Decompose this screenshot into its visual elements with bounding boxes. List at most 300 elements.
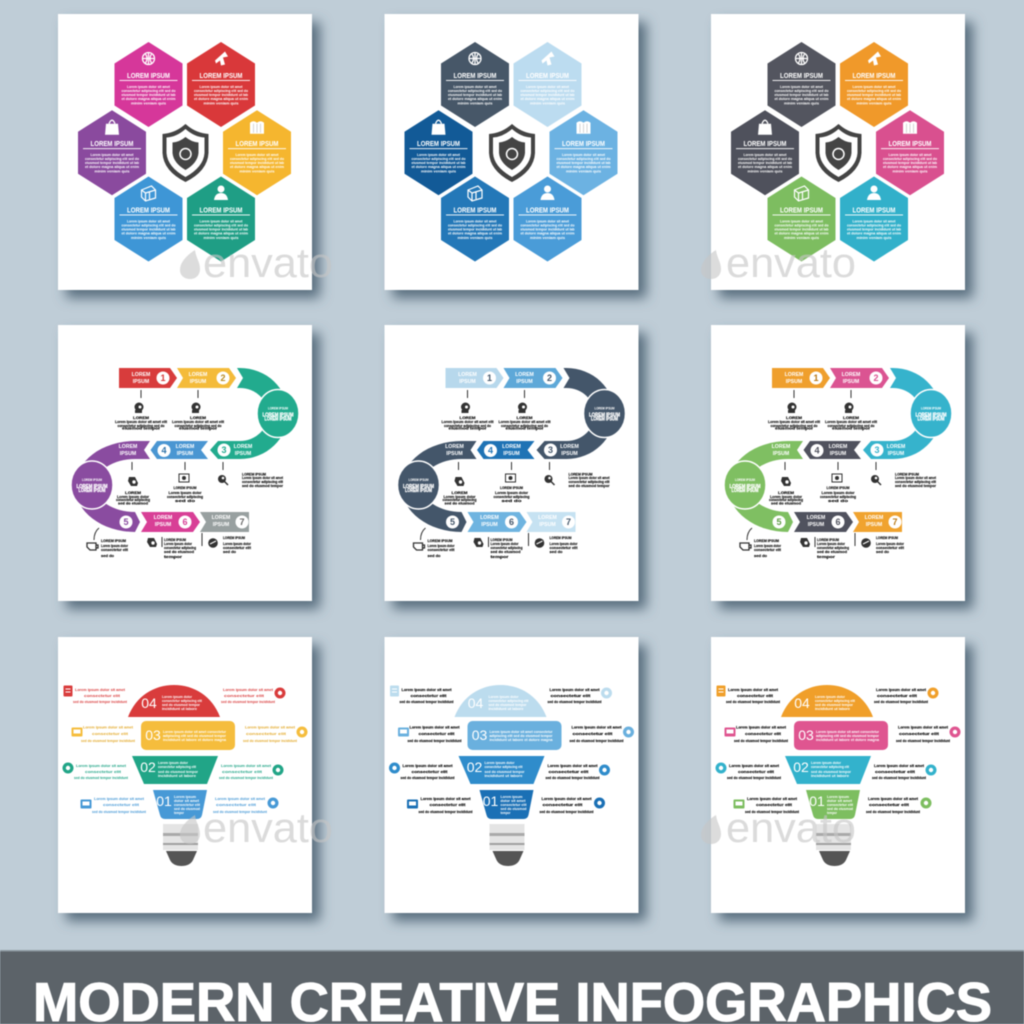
callout left band: Lorem ipsum dolor <box>117 495 149 499</box>
hexagon: blue: minim veniam quis <box>131 236 166 240</box>
side text second left: Lorem ipsum dolor sit amet <box>736 726 787 730</box>
hexagon: yellow: LOREM IPSUM <box>236 141 279 148</box>
hexagon: rose: et dolore magna aliqua ut enim <box>883 165 937 169</box>
step 7 arrow: LOREM <box>538 515 557 521</box>
bulb layer 04: Lorem ipsum dolor <box>815 695 846 699</box>
callout 5: Lorem ipsum dolor <box>754 544 781 548</box>
hexagon: strong blue: Lorem ipsum dolor sit amet <box>454 220 497 224</box>
side text blue right: Lorem ipsum dolor sit amet <box>215 797 266 801</box>
callout 6 <box>474 537 523 559</box>
circle label left: LOREM IPSUM <box>405 488 432 494</box>
callout 5 <box>740 528 782 558</box>
hexagon: slate: consectetur adipiscing elit sed do <box>448 89 503 93</box>
bulb layer 01: 01 <box>483 793 498 809</box>
hexagon: purple: LOREM IPSUM <box>90 141 134 148</box>
callout left band: LOREM <box>778 491 794 495</box>
side text top right: consectetur elit <box>877 694 918 698</box>
hexagon: mid blue: eiusmod tempor incididunt ut lab <box>520 228 575 232</box>
hexagon: pale blue: eiusmod tempor incididunt ut lab <box>520 93 575 97</box>
side text green right <box>219 764 284 780</box>
bulb layer 01: sed do eiusmod <box>174 807 200 811</box>
step 7 arrow: 7 <box>892 517 898 527</box>
hexagon: yellow <box>223 110 291 195</box>
step 4 arrow: LOREM <box>176 444 194 450</box>
circle label right: LOREM IPSUM <box>262 412 294 418</box>
step 1 arrow: IPSUM <box>459 379 476 385</box>
callout 1 <box>768 390 821 430</box>
hexagon: teal: LOREM IPSUM <box>852 208 896 214</box>
circle label right: LOREM IPSUM <box>589 412 620 418</box>
hexagon: pale blue: et dolore magna aliqua ut enim <box>520 97 574 101</box>
circle label left: LOREM IPSUM <box>403 484 434 490</box>
callout 5: sed do <box>428 554 441 558</box>
step 1 arrow: 1 <box>813 373 819 383</box>
step 4 arrow <box>150 441 208 459</box>
circle label left <box>71 461 113 509</box>
hexagon: sky blue <box>550 110 618 195</box>
hexagon: yellow: Lorem ipsum dolor sit amet <box>236 153 279 157</box>
callout 7: LOREM IPSUM <box>550 536 572 540</box>
hexagon: strong blue: minim veniam quis <box>458 236 492 240</box>
callout left band: LOREM <box>125 491 141 495</box>
circle label left: LOREM IPSUM <box>76 484 108 490</box>
icon: shield <box>816 124 862 182</box>
callout 6: tempor <box>817 555 836 559</box>
step 4 arrow: 4 <box>488 446 493 456</box>
bulb layer 03: adipiscing elit sed do eiusmod tempor <box>816 734 880 738</box>
bulb layer 03: Lorem ipsum dolor sit amet consectetur <box>490 730 553 734</box>
hexagon: blue: Lorem ipsum dolor sit amet <box>127 220 171 224</box>
callout left band: consectetur adipiscing <box>769 498 804 502</box>
hexagon: sky blue: et dolore magna aliqua ut enim <box>556 165 610 169</box>
callout 3: consectetur adipiscing elit <box>242 480 284 484</box>
bulb layer 03: Lorem ipsum dolor sit amet consectetur <box>816 730 880 734</box>
side text top left: Lorem ipsum dolor sit amet <box>402 688 452 692</box>
side text second right <box>896 726 960 743</box>
step 1 arrow: LOREM <box>132 372 150 378</box>
step 2 arrow <box>504 368 562 388</box>
bulb layer 01 <box>480 790 534 819</box>
step 7 arrow <box>526 512 576 532</box>
bulb layer 02: sed do eiusmod tempor <box>158 770 199 774</box>
step 4 arrow: LOREM <box>829 444 847 450</box>
step 3 curved band: IPSUM <box>888 451 904 457</box>
hexagon: dark grey: et dolore magna aliqua ut enim <box>738 165 792 169</box>
bulb layer 04: sed do eiusmod tempor <box>162 703 201 707</box>
bulb layer 01: 01 <box>156 793 172 809</box>
callout left band <box>442 462 477 506</box>
bulb layer 04: 04 <box>794 695 810 711</box>
callout left band: consectetur adipiscing <box>442 498 477 502</box>
bulb layer 03: adipiscing elit sed do eiusmod tempor <box>163 734 227 738</box>
hexagon: orange: minim veniam quis <box>856 102 892 106</box>
bulb layer 03: incididunt ut labore et dolore magna <box>816 738 880 742</box>
step 3 curved band: 3 <box>221 445 227 455</box>
hexagon: lime green: eiusmod tempor incididunt ut lab <box>774 228 829 232</box>
side text bottom right <box>866 797 932 814</box>
bulb layer 02 <box>132 756 218 784</box>
callout 6 <box>147 537 197 559</box>
step 2 arrow: LOREM <box>515 372 534 378</box>
step 3 curved band: IPSUM <box>561 451 578 457</box>
callout 6: LOREM IPSUM <box>490 538 512 542</box>
callout 5 <box>414 528 455 558</box>
step 6 arrow: IPSUM <box>481 522 498 528</box>
bulb layer 03: 03 <box>472 727 487 743</box>
hexagon: lime green: et dolore magna aliqua ut enim <box>774 232 828 236</box>
step 4 arrow <box>477 441 534 459</box>
side text bottom right: Lorem ipsum dolor sit amet <box>868 797 919 801</box>
bulb layer 02: incididunt ut labore <box>484 774 522 778</box>
step 6 arrow: IPSUM <box>808 522 824 528</box>
side text top left: sed do eiusmod tempor incididunt <box>400 700 454 704</box>
side text third left <box>389 762 455 780</box>
side text third left: consectetur elit <box>738 770 775 774</box>
callout 5: Lorem ipsum dolor <box>428 544 455 548</box>
callout 6: Lorem ipsum dolor <box>817 542 845 546</box>
bulb layer 01: dolor sit amet <box>827 799 853 803</box>
step 5 curved band: LOREM <box>119 444 137 450</box>
bulb layer 01: dolor sit amet <box>174 799 200 803</box>
side text second right: sed do eiusmod tempor incididunt <box>896 739 951 743</box>
bulb layer 04: Lorem ipsum dolor <box>488 695 519 699</box>
step 2 arrow: LOREM <box>189 372 207 378</box>
step 2 arrow: IPSUM <box>190 379 206 385</box>
panel: light bulb, blue <box>384 637 638 913</box>
side text yellow right: Lorem ipsum dolor sit amet <box>245 726 296 730</box>
side text green left: consectetur elit <box>85 770 122 774</box>
bulb layer 03 <box>794 721 888 750</box>
hexagon: pink: et dolore magna aliqua ut enim <box>122 97 176 101</box>
callout 4 <box>494 462 530 503</box>
step 5 curved band <box>75 441 150 532</box>
hexagon: charcoal: et dolore magna aliqua ut enim <box>774 97 828 101</box>
callout 7: sed do <box>876 550 890 554</box>
callout 2: Lorem ipsum dolor sit amet elit <box>825 420 878 424</box>
hexagon: rose: LOREM IPSUM <box>888 141 932 148</box>
hexagon: slate: minim veniam quis <box>458 102 492 106</box>
hexagon: mid blue: et dolore magna aliqua ut enim <box>520 232 574 236</box>
hexagon: dark grey: Lorem ipsum dolor sit amet <box>744 153 787 157</box>
side text yellow right <box>243 726 308 743</box>
callout 2: Lorem ipsum dolor sit amet elit <box>498 420 551 424</box>
step 2 arrow: 2 <box>547 373 552 383</box>
hexagon: sky blue: consectetur adipiscing elit sed do <box>556 157 611 161</box>
side text third right: consectetur elit <box>548 770 590 774</box>
circle label left: LOREM IPSUM <box>82 478 102 482</box>
hexagon: lime green: consectetur adipiscing elit sed do <box>774 224 829 228</box>
hexagon: red: et dolore magna aliqua ut enim <box>194 97 248 101</box>
side text green right: consectetur elit <box>222 770 263 774</box>
callout 2: consectetur adipiscing sed do <box>174 424 222 428</box>
side text bottom left: consectetur elit <box>756 803 793 807</box>
callout 3: consectetur adipiscing elit <box>895 480 937 484</box>
callout 2: LOREM <box>190 416 206 420</box>
step 3 curved band <box>536 368 614 459</box>
step 4 arrow: IPSUM <box>830 451 846 457</box>
side text green right: Lorem ipsum dolor sit amet <box>221 764 272 768</box>
hexagon: red: eiusmod tempor incididunt ut lab <box>194 93 249 97</box>
hexagon: pink: minim veniam quis <box>131 102 166 106</box>
step 3 curved band <box>863 368 941 459</box>
bulb layer 04: Lorem ipsum dolor <box>162 695 193 699</box>
step 7 arrow: IPSUM <box>866 522 882 528</box>
circle label right: LOREM IPSUM <box>268 406 288 410</box>
step 2 arrow: LOREM <box>842 372 860 378</box>
callout 3: LOREM IPSUM <box>568 472 592 476</box>
callout left band: sed do eiusmod <box>118 502 149 506</box>
panel: hexagon infographic, multicolour <box>58 14 312 290</box>
bulb layer 01 <box>153 790 207 819</box>
panel: hexagon infographic, vivid <box>711 14 965 290</box>
bulb layer 02 <box>458 756 544 784</box>
hexagon: lime green: LOREM IPSUM <box>780 208 823 214</box>
hexagon: slate: LOREM IPSUM <box>454 73 497 80</box>
side text third right: sed do eiusmod tempor incididunt <box>872 776 927 780</box>
callout 7: Lorem ipsum dolor <box>550 542 578 546</box>
callout 6: LOREM IPSUM <box>164 538 186 542</box>
hexagon: red: minim veniam quis <box>204 102 238 106</box>
bulb layer 04 <box>128 685 220 717</box>
bulb layer 03: 03 <box>798 727 814 743</box>
hexagon: green: minim veniam quis <box>204 236 238 240</box>
step 1 arrow <box>119 368 177 388</box>
side text yellow left: sed do eiusmod tempor incididunt <box>81 739 136 743</box>
step 7 arrow <box>200 512 249 532</box>
step 6 arrow <box>141 512 200 532</box>
callout left band: sed do eiusmod <box>444 502 475 506</box>
bulb layer 04: incididunt ut labore <box>162 707 197 711</box>
callout 7: sed do <box>223 550 237 554</box>
circle label right <box>910 390 952 438</box>
side text yellow right: sed do eiusmod tempor incididunt <box>243 739 298 743</box>
callout 2: consectetur adipiscing sed do <box>828 424 875 428</box>
hexagon: orange <box>840 42 908 127</box>
callout 6: consectetur adipiscing <box>164 546 197 550</box>
side text second left: consectetur elit <box>745 732 782 736</box>
step 6 arrow: 6 <box>835 517 841 527</box>
callout 1: eiusmod tempor <box>448 426 487 430</box>
hexagon: teal: Lorem ipsum dolor sit amet <box>852 220 896 224</box>
hexagon: sky blue: eiusmod tempor incididunt ut lab <box>556 161 611 165</box>
bulb layer 01: 01 <box>809 793 825 809</box>
callout 4: Lorem ipsum dolor <box>168 491 202 495</box>
callout 7: sed do <box>550 550 563 554</box>
side text third left: Lorem ipsum dolor sit amet <box>729 764 780 768</box>
bulb layer 02: 02 <box>793 759 809 775</box>
side text bottom right: sed do eiusmod tempor incididunt <box>540 810 594 814</box>
bulb layer 01: tempor <box>174 811 184 815</box>
bulb layer 03: incididunt ut labore et dolore magna <box>490 738 554 742</box>
bulb layer 04: incididunt ut labore <box>488 707 524 711</box>
step 4 arrow: IPSUM <box>503 451 520 457</box>
hexagon: red: Lorem ipsum dolor sit amet <box>200 85 243 89</box>
side text second right: Lorem ipsum dolor sit amet <box>898 726 949 730</box>
bulb layer 01: consectetur elit <box>500 803 527 807</box>
callout 3: Lorem ipsum dolor sit amet <box>895 476 937 480</box>
hexagon: green: LOREM IPSUM <box>200 208 243 214</box>
step 4 arrow: LOREM <box>502 444 521 450</box>
hexagon: charcoal: consectetur adipiscing elit sed do <box>774 89 829 93</box>
bulb layer 04: consectetur adipiscing elit <box>162 699 203 703</box>
hexagon: purple: Lorem ipsum dolor sit amet <box>90 153 134 157</box>
hexagon: strong blue <box>441 176 509 262</box>
side text second left: consectetur elit <box>418 732 455 736</box>
callout 3: Lorem ipsum dolor sit amet <box>242 476 284 480</box>
side text top left <box>390 686 454 704</box>
step 4 arrow: IPSUM <box>177 451 193 457</box>
step 2 arrow: 2 <box>220 373 226 383</box>
step 6 arrow: 6 <box>509 517 514 527</box>
bulb layer 04 <box>454 685 546 717</box>
step 3 curved band: 3 <box>874 445 880 455</box>
bulb layer 03: 03 <box>145 727 161 743</box>
hexagon: rose: minim veniam quis <box>892 170 928 174</box>
callout 4: consectetur adipiscing <box>494 495 530 499</box>
hexagon: yellow: et dolore magna aliqua ut enim <box>230 165 284 169</box>
side text second left <box>398 726 462 743</box>
circle label left <box>724 461 766 509</box>
side text top right: Lorem ipsum dolor sit amet <box>550 688 600 692</box>
hexagon: dark grey: minim veniam quis <box>748 170 782 174</box>
step 1 arrow: IPSUM <box>133 379 149 385</box>
callout 4: LOREM IPSUM <box>500 486 523 490</box>
circle label left: LOREM IPSUM <box>408 478 429 482</box>
circle label right: LOREM IPSUM <box>916 412 946 418</box>
side text second left: sed do eiusmod tempor incididunt <box>408 739 462 743</box>
callout 3 <box>544 462 610 488</box>
side text third left: sed do eiusmod tempor incididunt <box>727 776 782 780</box>
panel: process path, blue <box>384 325 638 601</box>
bulb layer 01 <box>806 790 860 819</box>
step 3 curved band: 3 <box>548 445 553 455</box>
side text red left: consectetur elit <box>84 694 121 698</box>
side text top right: Lorem ipsum dolor sit amet <box>876 688 927 692</box>
hexagon: navy: minim veniam quis <box>421 170 456 174</box>
hexagon: rose: eiusmod tempor incididunt ut lab <box>883 161 938 165</box>
step 7 arrow <box>853 512 902 532</box>
callout 3: LOREM IPSUM <box>242 472 266 476</box>
hexagon: orange: LOREM IPSUM <box>852 73 896 80</box>
hexagon: dark grey <box>731 110 799 195</box>
bulb layer 03: adipiscing elit sed do eiusmod tempor <box>490 734 553 738</box>
side text top right: sed do eiusmod tempor incididunt <box>548 700 602 704</box>
hexagon: red: consectetur adipiscing elit sed do <box>194 89 249 93</box>
step 1 arrow: LOREM <box>458 372 477 378</box>
side text third left: sed do eiusmod tempor incididunt <box>400 776 455 780</box>
panel: process path, vivid <box>711 325 965 601</box>
bulb layer 03 <box>468 721 562 750</box>
side text blue left: Lorem ipsum dolor sit amet <box>94 797 145 801</box>
hexagon: slate <box>441 42 509 127</box>
side text bottom right: consectetur elit <box>542 803 584 807</box>
hexagon: green: Lorem ipsum dolor sit amet <box>200 220 243 224</box>
bulb layer 04: sed do eiusmod tempor <box>815 703 854 707</box>
step 5 curved band: IPSUM <box>446 451 463 457</box>
hexagon: teal: et dolore magna aliqua ut enim <box>847 232 901 236</box>
side text bottom right: consectetur elit <box>869 803 910 807</box>
bulb layer 02: 02 <box>140 759 156 775</box>
callout 7: consectetur elit <box>223 546 252 550</box>
hexagon: pale blue: consectetur adipiscing elit sed do <box>520 89 575 93</box>
bulb layer 01: dolor sit amet <box>500 799 526 803</box>
step 3 curved band: IPSUM <box>235 451 251 457</box>
panel: light bulb, vivid <box>711 637 965 913</box>
callout 5: LOREM IPSUM <box>754 539 779 543</box>
callout 5: sed do <box>754 554 768 558</box>
step 4 arrow: 4 <box>814 446 820 456</box>
callout 7: LOREM IPSUM <box>876 536 898 540</box>
callout 6: LOREM IPSUM <box>817 538 839 542</box>
hexagon: teal: minim veniam quis <box>856 236 892 240</box>
bulb layer 02: incididunt ut labore <box>811 774 849 778</box>
step 2 arrow: IPSUM <box>516 379 533 385</box>
bulb layer 01: sed do eiusmod <box>500 807 526 811</box>
hexagon: purple: eiusmod tempor incididunt ut lab <box>85 161 140 165</box>
callout 6: tempor <box>164 555 183 559</box>
side text green right: sed do eiusmod tempor incididunt <box>219 776 274 780</box>
callout 3 <box>871 462 937 488</box>
step 7 arrow: IPSUM <box>213 522 229 528</box>
side text bottom right: Lorem ipsum dolor sit amet <box>542 797 592 801</box>
callout 1: consectetur adipiscing sed do <box>770 424 818 428</box>
callout 4: sed do <box>175 499 196 503</box>
hexagon: mid blue: minim veniam quis <box>530 236 565 240</box>
hexagon: purple: minim veniam quis <box>94 170 130 174</box>
hexagon: navy <box>404 110 472 195</box>
bulb layer 04: 04 <box>468 695 483 711</box>
callout 1: LOREM <box>460 416 476 420</box>
hexagon: blue <box>114 176 182 262</box>
bulb layer 03: Lorem ipsum dolor sit amet consectetur <box>163 730 227 734</box>
panel: hexagon infographic, blue <box>384 14 638 290</box>
side text red right: Lorem ipsum dolor sit amet <box>223 688 274 692</box>
callout 3: consectetur adipiscing elit <box>568 480 610 484</box>
hexagon: pink <box>114 42 182 127</box>
step 5 curved band: IPSUM <box>120 451 136 457</box>
circle label right: LOREM IPSUM <box>594 406 615 410</box>
hexagon: purple: consectetur adipiscing elit sed do <box>85 157 140 161</box>
bulb layer 01: consectetur elit <box>827 803 854 807</box>
callout 6: consectetur adipiscing <box>490 546 523 550</box>
callout 3: sed do eiusmod tempor <box>242 484 283 488</box>
side text top left: sed do eiusmod tempor incididunt <box>726 700 781 704</box>
hexagon: lime green: minim veniam quis <box>784 236 819 240</box>
side text blue right <box>213 797 278 814</box>
bulb layer 01: Lorem ipsum <box>174 795 196 799</box>
callout 1: LOREM <box>133 416 149 420</box>
side text red left: Lorem ipsum dolor sit amet <box>75 688 126 692</box>
side text blue left: sed do eiusmod tempor incididunt <box>92 810 147 814</box>
bulb layer 01: tempor <box>500 811 511 815</box>
step 5 curved band: IPSUM <box>773 451 789 457</box>
bulb layer 03 <box>141 721 235 750</box>
watermark: bottom left: envato <box>203 804 333 851</box>
hexagon: sky blue: minim veniam quis <box>566 170 601 174</box>
step 2 arrow <box>830 368 889 388</box>
step 5 curved band: 5 <box>450 517 455 527</box>
step 2 arrow: 2 <box>873 373 879 383</box>
callout 6: Lorem ipsum dolor <box>490 542 519 546</box>
bulb layer 01: consectetur elit <box>174 803 201 807</box>
icon: shield <box>489 124 535 182</box>
callout 7: Lorem ipsum dolor <box>876 542 904 546</box>
hexagon: yellow: consectetur adipiscing elit sed do <box>230 157 285 161</box>
hexagon: teal: eiusmod tempor incididunt ut lab <box>847 228 902 232</box>
hexagon: dark grey: eiusmod tempor incididunt ut lab <box>738 161 793 165</box>
hexagon: yellow: minim veniam quis <box>240 170 274 174</box>
hexagon: green: consectetur adipiscing elit sed do <box>194 224 249 228</box>
